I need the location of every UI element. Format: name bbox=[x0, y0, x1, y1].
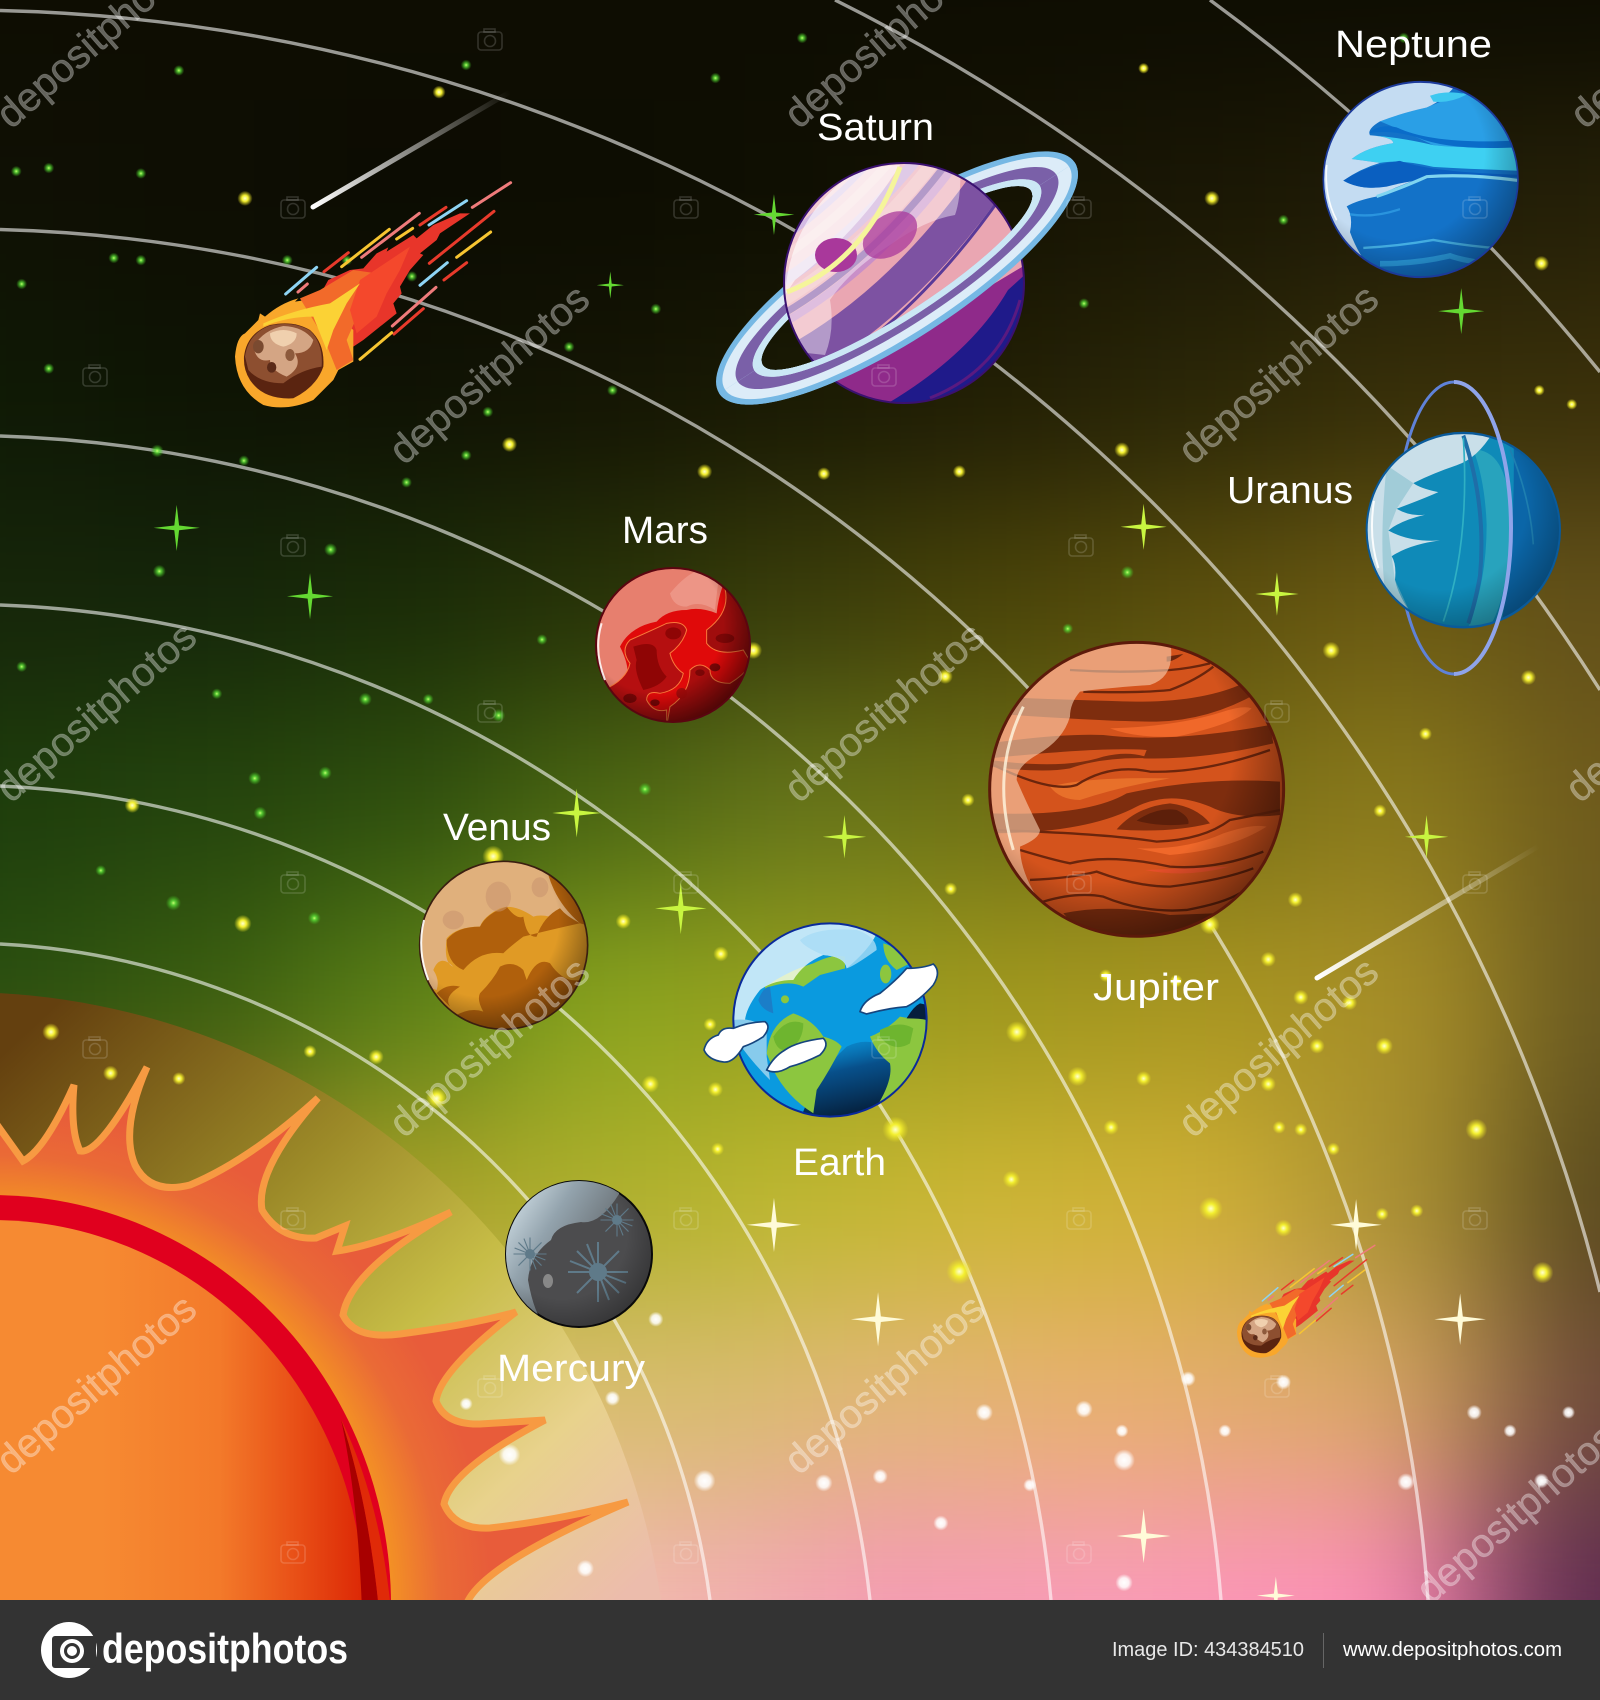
sun rim shadow bbox=[341, 1419, 379, 1610]
planet: Jupiter bbox=[988, 640, 1286, 938]
Saturn ring, back bbox=[685, 111, 1109, 445]
Uranus ring, back bbox=[1397, 382, 1511, 674]
label: Mercury: Mercury bbox=[497, 1348, 645, 1390]
watermark text: depositphotos bbox=[776, 1286, 993, 1483]
image id: Image ID: 434384510 bbox=[1112, 1639, 1304, 1661]
label: Venus: Venus bbox=[443, 807, 551, 849]
planet: Uranus bbox=[1367, 382, 1567, 674]
logo wordmark: depositphotos bbox=[102, 1625, 348, 1672]
meteor: large bbox=[235, 183, 511, 407]
divider bbox=[1323, 1633, 1324, 1668]
Earth clouds bbox=[704, 964, 937, 1072]
watermark text: depositphotos bbox=[381, 276, 598, 473]
watermark text: depositphotos bbox=[381, 949, 598, 1146]
planet: Venus bbox=[417, 860, 592, 1033]
shooting star streak: upper left bbox=[313, 92, 510, 207]
website: www.depositphotos.com bbox=[1342, 1639, 1562, 1661]
planets: Mars and Venus bbox=[417, 567, 753, 1033]
sun bbox=[0, 1067, 628, 1700]
label: Saturn: Saturn bbox=[817, 107, 934, 149]
label: Jupiter: Jupiter bbox=[1093, 967, 1219, 1009]
planet: Mars bbox=[596, 567, 753, 727]
logo icon bbox=[41, 1622, 97, 1678]
label: Mars: Mars bbox=[622, 510, 708, 552]
label: Neptune: Neptune bbox=[1335, 24, 1492, 66]
watermark text: depositphotos bbox=[1170, 949, 1387, 1146]
Saturn globe bbox=[783, 162, 1025, 404]
meteor: small bbox=[1237, 1245, 1375, 1358]
watermark text: depositphotos bbox=[1170, 276, 1387, 473]
Uranus ring, front bbox=[1454, 382, 1511, 674]
planet: Mercury bbox=[500, 1175, 652, 1330]
Uranus globe bbox=[1367, 426, 1567, 631]
sun body bbox=[0, 1220, 364, 1700]
footer banner bbox=[0, 1600, 1600, 1700]
label: Uranus: Uranus bbox=[1227, 470, 1353, 512]
planet: Saturn bbox=[716, 151, 1078, 405]
sparkle stars bbox=[154, 194, 1486, 1615]
planet: Neptune bbox=[1320, 70, 1520, 280]
watermark text: depositphotos bbox=[776, 614, 993, 811]
shooting star streak: lower right bbox=[1317, 846, 1539, 978]
sun glow disc bbox=[0, 992, 668, 1700]
Saturn ring, front bbox=[719, 162, 1078, 405]
planet: Earth bbox=[704, 923, 937, 1127]
sun flares bbox=[0, 1067, 628, 1610]
sun red rim bbox=[0, 1195, 391, 1700]
label: Earth: Earth bbox=[793, 1142, 886, 1184]
